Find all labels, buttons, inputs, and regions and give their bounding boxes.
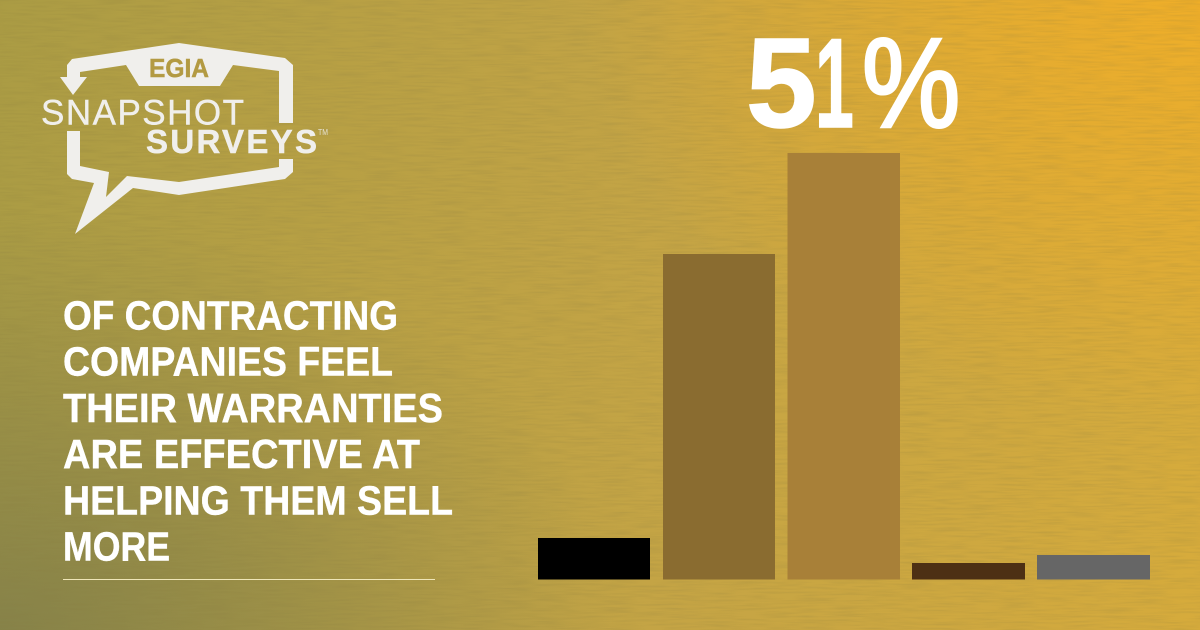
bar 3: tan, 51%	[788, 153, 900, 580]
logo text: trademark: TM	[318, 128, 328, 137]
headline text: MORE	[63, 524, 170, 570]
icon: speech bubble bottom with tail	[67, 131, 293, 234]
big statistic: 51%: 1	[815, 12, 854, 154]
logo: EGIA Snapshot Surveys	[41, 43, 328, 234]
headline text: HELPING THEM SELL	[63, 478, 453, 524]
big statistic: 51%: 5	[746, 12, 817, 154]
logo text: EGIA: EGIA	[149, 53, 209, 83]
headline text: ARE EFFECTIVE AT	[63, 431, 420, 477]
bar 1: black	[538, 538, 650, 580]
bar chart	[538, 153, 1150, 580]
headline text: COMPANIES FEEL	[63, 339, 393, 385]
bar 5: grey	[1037, 555, 1150, 580]
headline text	[63, 292, 453, 570]
big statistic: 51%: %	[862, 13, 960, 155]
icon: speech bubble top with arrow	[60, 43, 293, 123]
headline text: THEIR WARRANTIES	[63, 385, 443, 431]
big statistic: 51%	[746, 12, 960, 155]
headline text: OF CONTRACTING	[63, 292, 398, 338]
logo text: SNAPSHOT: SNAPSHOT	[41, 94, 244, 132]
bar 4: dark brown	[912, 563, 1025, 580]
bar 2: dark tan	[663, 254, 775, 580]
logo text: SURVEYS: SURVEYS	[146, 123, 317, 160]
